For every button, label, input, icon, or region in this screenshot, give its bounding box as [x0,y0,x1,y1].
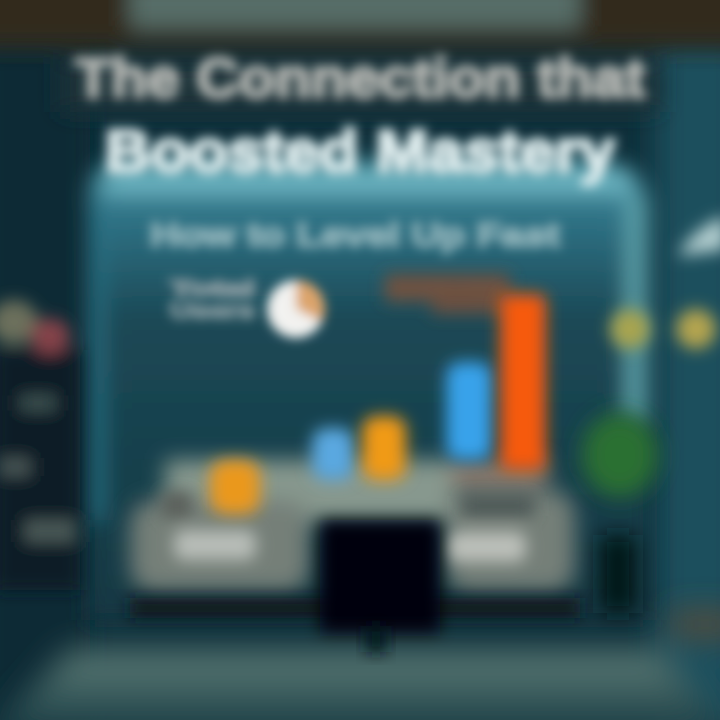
pie chart icon [267,280,325,338]
stat label: Users [170,298,255,323]
title [75,46,645,185]
sofa cushions [130,492,580,618]
wall lamps [610,216,720,349]
bar: red-orange tallest [500,294,546,470]
plant [582,413,658,613]
subtitle: How to Level Up Fast [150,216,560,253]
arched alcove wall [88,160,650,620]
stat label: Total [170,276,255,301]
bar chart [210,294,546,514]
monitor stand [366,626,386,652]
floor rug [0,612,720,720]
stat label [170,276,255,323]
bar: blue tall [446,362,492,460]
title: The Connection that [75,46,645,109]
title: Boosted Mastery [105,118,616,185]
chart heading: Growth Rate [385,279,505,296]
chart heading [385,274,510,314]
monitor [320,520,440,636]
bar: orange short left [210,460,260,514]
left shelf [0,300,80,590]
bar: blue small [312,428,354,480]
bar: orange medium [362,416,406,480]
ceiling [0,0,720,112]
sofa [130,460,575,592]
